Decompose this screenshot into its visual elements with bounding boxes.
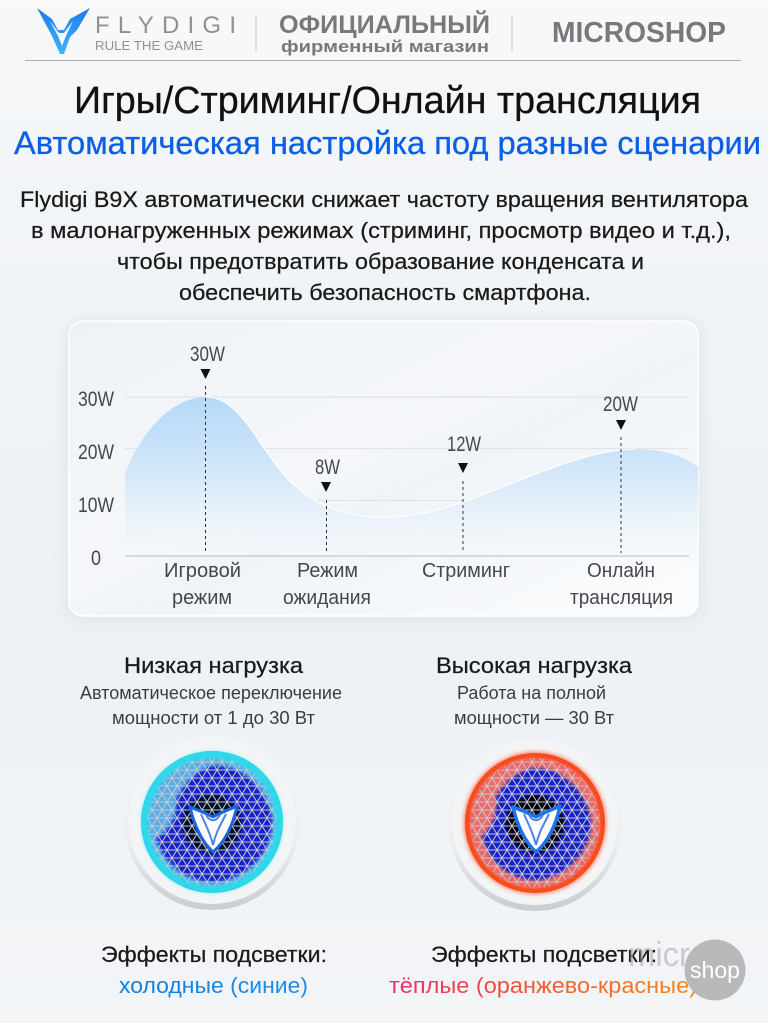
icon: Flydigi logo (37, 8, 90, 54)
text: warm light effects: Эффекты подсветки: (431, 942, 657, 967)
description text (20, 187, 748, 305)
marker: 12W streaming (447, 433, 481, 553)
description text: чтобы предотвратить образование конденсата и (117, 249, 644, 274)
microshop text: MICROSHOP (552, 17, 726, 49)
x axis labels: режим (172, 587, 232, 609)
high load description: мощности — 30 Вт (454, 708, 614, 728)
watermark: microshop: micr (628, 936, 690, 974)
icon: red cooler (449, 739, 621, 911)
icon: blue cooler (125, 736, 299, 910)
x axis labels: Стриминг (422, 560, 510, 582)
low load description (80, 683, 342, 728)
x axis labels: ожидания (283, 587, 371, 609)
text: cool light effects: холодные (синие) (119, 973, 308, 998)
marker: 30W gaming (190, 343, 225, 553)
description text: в малонагруженных режимах (стриминг, просмотр видео и т.д.), (31, 218, 731, 243)
low load description: Автоматическое переключение (80, 683, 342, 703)
low load description: мощности от 1 до 30 Вт (112, 708, 315, 728)
watermark: microshop: shop (690, 957, 740, 983)
header (25, 8, 741, 61)
brand slogan: RULE THE GAME (95, 39, 203, 53)
text: cool light effects (101, 942, 327, 998)
x axis labels: трансляция (570, 587, 673, 609)
y axis labels (78, 388, 114, 570)
marker: 30W gaming: 30W (190, 343, 225, 366)
marker: 20W live (603, 393, 638, 553)
text: warm light effects (389, 942, 697, 998)
panel: high load (436, 653, 633, 728)
description text: Flydigi B9X автоматически снижает частоту вращения вентилятора (20, 187, 748, 212)
description text: обеспечить безопасность смартфона. (179, 280, 591, 305)
panel: low load (80, 653, 342, 728)
y axis labels: 10W (78, 494, 114, 517)
official store text: ОФИЦИАЛЬНЫЙ (279, 9, 490, 39)
marker: 20W live: 20W (603, 393, 638, 416)
y axis labels: 0 (91, 547, 101, 570)
marker: 8W standby: 8W (315, 456, 340, 479)
title: Игры/Стриминг/Онлайн трансляция (74, 80, 701, 122)
text: cool light effects: Эффекты подсветки: (101, 942, 327, 967)
high load description (454, 683, 614, 728)
heading: low load: Низкая нагрузка (124, 653, 304, 678)
y axis labels: 30W (78, 388, 114, 411)
x axis labels (164, 560, 673, 609)
panel: power chart (64, 318, 703, 621)
text: warm light effects: тёплые (оранжево-красные) (389, 973, 697, 998)
marker: 12W streaming: 12W (447, 433, 481, 456)
x axis labels: Игровой (164, 560, 241, 582)
marker: 8W standby (315, 456, 340, 553)
store subtitle: фирменный магазин (281, 37, 489, 56)
watermark: microshop (628, 936, 746, 1000)
y axis labels: 20W (78, 441, 114, 464)
area curve (125, 397, 698, 556)
heading: high load: Высокая нагрузка (436, 653, 633, 678)
x axis labels: Режим (297, 560, 358, 582)
x axis labels: Онлайн (587, 560, 655, 582)
high load description: Работа на полной (457, 683, 606, 703)
subtitle: Автоматическая настройка под разные сценарии (14, 125, 761, 161)
brand wordmark: FLYDIGI (95, 12, 236, 39)
